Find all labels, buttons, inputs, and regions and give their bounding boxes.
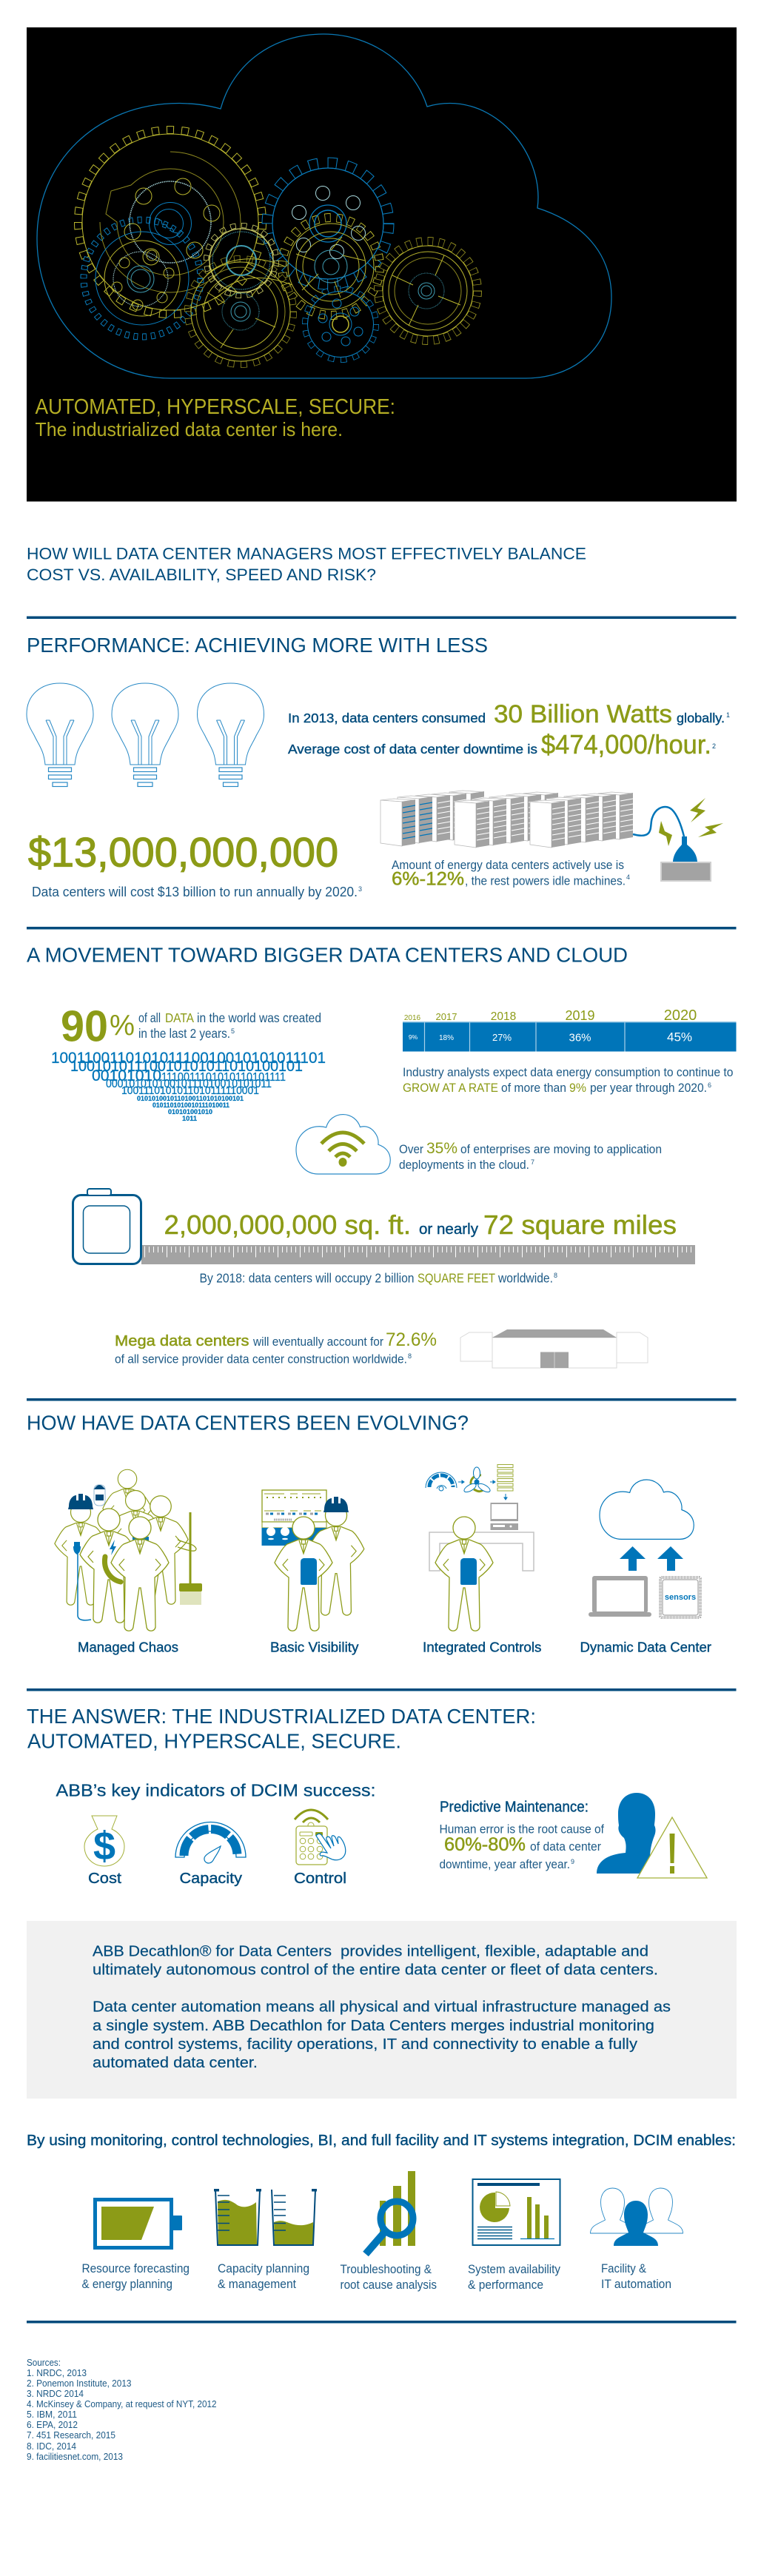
text: cloud deployments (399, 1140, 662, 1172)
sources list: 7. 451 Research, 2015 (27, 2429, 115, 2441)
benefit: capacity planning: & management (218, 2277, 296, 2291)
text: cloud deployments: deployments in the cloud. (399, 1158, 529, 1172)
stat: 13 billion: $13,000,000,000 (28, 829, 338, 875)
indicator: control: Control (294, 1871, 346, 1887)
benefit: resource forecasting: Resource forecasting (81, 2261, 190, 2275)
text: cloud deployments: Over (399, 1142, 423, 1156)
sources list: 8. IDC, 2014 (27, 2441, 76, 2452)
text block: automated data center. (93, 2054, 258, 2071)
icon: broom (179, 1512, 202, 1605)
stat: 13 billion: 3 (358, 885, 362, 893)
icon: tape measure (73, 1189, 695, 1264)
icon: three light bulbs (27, 683, 264, 786)
text: by 2018: SQUARE FEET (418, 1270, 495, 1285)
text block: and control systems, facility operations, IT and connectivity to enable a fully (93, 2036, 638, 2053)
text: growth rate: 6 (708, 1081, 711, 1089)
text block: provides intelligent, flexible, adaptable and (341, 1942, 648, 1960)
icon: mini server stack (497, 1464, 513, 1491)
benefit: resource forecasting: & energy planning (81, 2277, 172, 2291)
text: mega data centers: Mega data centers (115, 1333, 249, 1349)
icon: server racks (380, 791, 633, 848)
stat: 90 percent of data: % (110, 1010, 135, 1042)
sources list: 3. NRDC 2014 (27, 2388, 84, 2399)
sources list: 6. EPA, 2012 (27, 2419, 78, 2430)
hero panel (27, 27, 737, 502)
binary funnel: 10010101110010101011010100101 (70, 1058, 303, 1075)
icon: sensor chip (660, 1577, 700, 1617)
intro question: HOW WILL DATA CENTER MANAGERS MOST EFFECTIVELY BALANCE (27, 545, 586, 563)
text: cloud deployments: 35% (426, 1140, 457, 1157)
stat: square feet: 72 square miles (483, 1210, 677, 1240)
stat: square feet: 2,000,000,000 sq. ft. (164, 1210, 411, 1240)
text: cloud deployments: 7 (531, 1158, 534, 1166)
bar chart: growth by year (403, 1007, 736, 1051)
text: growth rate (403, 1065, 733, 1095)
icon: data center building (460, 1329, 648, 1368)
illustration: integrated controls (426, 1464, 534, 1631)
bar chart: growth by year: 2019 (565, 1008, 595, 1023)
icon: plug, cable and lightning (633, 798, 723, 881)
benefit: capacity planning: Capacity planning (218, 2261, 309, 2275)
benefit: capacity planning (214, 2189, 317, 2291)
bar chart: growth by year: 27% (492, 1032, 512, 1043)
stat: 30 billion watts: 1 (726, 711, 730, 719)
text: growth rate: 9% (569, 1081, 586, 1095)
section: evolving (27, 1411, 711, 1655)
sources list: 5. IBM, 2011 (27, 2409, 77, 2420)
stat: downtime cost: 2 (712, 742, 716, 750)
heading: the answer: THE ANSWER: THE INDUSTRIALIZED DATA CENTER: (27, 1705, 536, 1728)
icon: cloud outline (37, 34, 611, 378)
icon: cloud (600, 1480, 694, 1539)
desk (429, 1532, 534, 1571)
callout: predictive maintenance (440, 1799, 604, 1871)
text: growth rate: per year through 2020. (590, 1081, 707, 1095)
callout: predictive maintenance: 9 (571, 1858, 574, 1865)
binary funnel: 1110011101010110101111 (161, 1071, 286, 1084)
icon: small gauge (426, 1472, 457, 1491)
binary funnel: 1001110101011010111110001 (121, 1084, 259, 1097)
stat: square feet (164, 1210, 677, 1240)
control panel (262, 1490, 327, 1546)
binary funnel: 0101101010010111010011 (152, 1101, 230, 1110)
stat: 90 percent of data (61, 1002, 321, 1051)
stat: square feet: or nearly (419, 1221, 478, 1238)
label: managed chaos: Managed Chaos (78, 1640, 178, 1655)
indicator: cost: Cost (88, 1871, 121, 1887)
binary funnel: 01010100101101001101010100101 (137, 1095, 244, 1103)
benefit: resource forecasting (81, 2200, 190, 2291)
heading: evolving: HOW HAVE DATA CENTERS BEEN EVOLVING? (27, 1411, 469, 1435)
bar chart: growth by year: 2016 (404, 1014, 421, 1022)
callout: predictive maintenance: downtime, year after year. (440, 1858, 570, 1871)
text block: ABB Decathlon® for Data Centers (93, 1942, 332, 1960)
benefit: facility and IT automation: Facility & (601, 2261, 647, 2275)
stat: 30 billion watts: In 2013, data centers consumed (288, 711, 486, 725)
stat: energy used (392, 858, 630, 890)
illustration: dynamic data center (589, 1480, 700, 1617)
section: performance (27, 634, 730, 899)
indicator: capacity: Capacity (179, 1871, 242, 1887)
binary funnel: 1011 (182, 1115, 198, 1123)
text: cloud deployments: of enterprises are moving to application (460, 1142, 662, 1156)
stat: energy used: , the rest powers idle machines. (465, 873, 626, 888)
benefit: system availability: System availability (468, 2262, 560, 2276)
text: growth rate: Industry analysts expect data energy consumption to continue to (403, 1065, 733, 1079)
hero title: AUTOMATED, HYPERSCALE, SECURE: (36, 395, 395, 419)
icon: human error warning (597, 1793, 707, 1878)
text block (93, 1942, 671, 2071)
heading: movement: A MOVEMENT TOWARD BIGGER DATA CENTERS AND CLOUD (27, 943, 628, 967)
bar chart: growth by year: 2020 (664, 1007, 697, 1024)
gears illustration (78, 130, 477, 364)
icon: computer (490, 1503, 518, 1530)
benefit: troubleshooting: root cause analysis (341, 2278, 437, 2292)
benefit: troubleshooting: Troubleshooting & (341, 2262, 432, 2276)
indicator: cost (84, 1816, 124, 1887)
benefit: system availability (468, 2179, 560, 2292)
text: mega data centers: 8 (408, 1352, 412, 1360)
icon: vacuum tube (94, 1485, 105, 1506)
sources list: 4. McKinsey & Company, at request of NYT, 2012 (27, 2398, 216, 2409)
text block: Data center automation means all physical and virtual infrastructure managed as (93, 1999, 671, 2015)
bar chart: growth by year: 45% (667, 1030, 692, 1044)
stat: energy used: 6%-12% (392, 869, 464, 890)
bar chart: growth by year: 9% (409, 1033, 418, 1041)
stat: 90 percent of data: DATA (165, 1010, 194, 1025)
stat: downtime cost: Average cost of data center downtime is (288, 742, 537, 757)
benefit: troubleshooting (341, 2171, 437, 2292)
icon: clipboard (301, 1558, 317, 1585)
icon: plug and cord (73, 1542, 91, 1620)
callout: predictive maintenance: of data center (530, 1840, 601, 1854)
heading: the answer (27, 1705, 536, 1753)
bar chart: growth by year: 2017 (436, 1011, 457, 1022)
stat: 30 billion watts: 30 Billion Watts (494, 700, 672, 728)
text: mega data centers: of all service provider data center construction worldwide. (115, 1353, 407, 1366)
text: growth rate: of more than (501, 1081, 566, 1095)
stat: 13 billion: Data centers will cost $13 billion to run annually by 2020. (32, 885, 358, 899)
heading: performance: PERFORMANCE: ACHIEVING MORE WITH LESS (27, 634, 488, 657)
label: dynamic data center: Dynamic Data Center (580, 1640, 711, 1655)
section: the answer (27, 1705, 737, 2292)
bar chart: growth by year: 36% (569, 1032, 591, 1044)
text block: ultimately autonomous control of the entire data center or fleet of data centers. (93, 1962, 658, 1978)
stat: 90 percent of data: 90 (61, 1002, 108, 1051)
intro question (27, 545, 586, 584)
text: by 2018 (200, 1270, 557, 1285)
callout: predictive maintenance: Human error is the root cause of (440, 1822, 604, 1836)
icon: clipboard (460, 1558, 477, 1585)
illustration: managed chaos (55, 1469, 202, 1631)
label: basic visibility: Basic Visibility (270, 1640, 358, 1655)
binary funnel: 00101010 (92, 1067, 161, 1084)
icon: sensor chip: sensors (665, 1593, 696, 1602)
stat: 13 billion (28, 829, 362, 899)
sources list: Sources: (27, 2357, 61, 2368)
sources list: 9. facilitiesnet.com, 2013 (27, 2451, 123, 2462)
text: by 2018: 8 (554, 1272, 557, 1279)
text: growth rate: GROW AT A RATE (403, 1081, 498, 1095)
bar chart: growth by year: 2018 (491, 1010, 516, 1023)
icon: phone (104, 1557, 121, 1582)
indicator: cost: $ (93, 1824, 115, 1868)
binary funnel: 00010101010010111010010101011 (106, 1078, 272, 1090)
callout: predictive maintenance: 60%-80% (444, 1834, 526, 1855)
stat: 90 percent of data: in the last 2 years. (138, 1026, 230, 1041)
callout: predictive maintenance: Predictive Maintenance: (440, 1799, 589, 1815)
indicator: capacity (175, 1822, 246, 1887)
section: bigger data centers (27, 943, 736, 1368)
benefit: facility and IT automation (591, 2188, 683, 2291)
stat: 30 billion watts (288, 700, 730, 728)
sources list (27, 2357, 216, 2462)
intro question: COST VS. AVAILABILITY, SPEED AND RISK? (27, 566, 376, 584)
stat: 90 percent of data: in the world was created (197, 1010, 321, 1025)
illustration: basic visibility (262, 1490, 364, 1631)
indicator: control (294, 1810, 346, 1887)
text: DCIM enables: By using monitoring, control technologies, BI, and full facility and IT systems integration, DCIM enables: (27, 2133, 736, 2149)
stat: 90 percent of data: 5 (231, 1027, 235, 1035)
text: by 2018: worldwide. (497, 1270, 553, 1285)
text: mega data centers: 72.6% (386, 1329, 437, 1350)
icon: lightning (110, 1540, 116, 1555)
subheading: key indicators: ABB’s key indicators of DCIM success: (56, 1781, 375, 1800)
sources list: 2. Ponemon Institute, 2013 (27, 2378, 132, 2389)
hero subtitle: The industrialized data center is here. (36, 418, 343, 440)
binary funnel: 010101001010 (168, 1108, 212, 1116)
icon: up arrows (620, 1546, 683, 1571)
benefit: facility and IT automation: IT automation (601, 2277, 671, 2291)
label: integrated controls: Integrated Controls (423, 1640, 542, 1655)
benefit: system availability: & performance (468, 2278, 543, 2292)
stat: downtime cost: $474,000/hour. (541, 729, 711, 759)
stat: downtime cost (288, 729, 716, 759)
text: mega data centers: will eventually account for (252, 1335, 383, 1349)
heading: the answer: AUTOMATED, HYPERSCALE, SECURE. (27, 1729, 401, 1753)
stat: 30 billion watts: globally. (677, 711, 725, 725)
icon: fan (463, 1467, 492, 1494)
text: by 2018: By 2018: data centers will occupy 2 billion (200, 1270, 415, 1285)
stat: energy used: 4 (626, 873, 630, 881)
text block: a single system. ABB Decathlon for Data Centers merges industrial monitoring (93, 2017, 654, 2034)
text: mega data centers (115, 1329, 437, 1366)
binary funnel: 100110011010101110010010101011101 (51, 1050, 326, 1067)
binary funnel (51, 1050, 326, 1123)
icon: laptop (589, 1576, 651, 1617)
stat: 90 percent of data: of all (138, 1010, 161, 1025)
sources list: 1. NRDC, 2013 (27, 2367, 87, 2378)
bar chart: growth by year: 18% (439, 1034, 454, 1042)
panel: decathlon description (27, 1921, 737, 2099)
stat: energy used: Amount of energy data centers actively use is (392, 858, 624, 872)
icon: wifi cloud (296, 1115, 390, 1174)
